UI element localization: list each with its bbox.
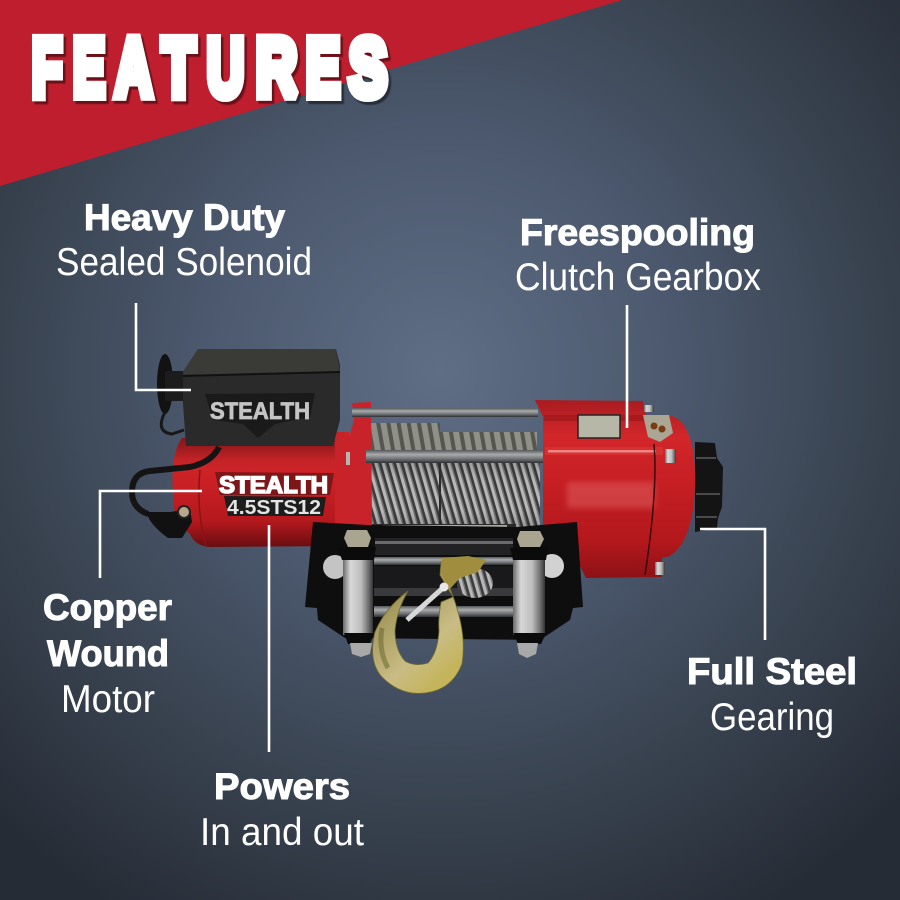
clutch knob — [695, 442, 723, 532]
hook — [373, 556, 493, 693]
leader line: powers — [268, 525, 270, 752]
label: heavy duty solenoid — [56, 197, 312, 284]
wire rope eye — [457, 568, 493, 598]
title: R — [256, 22, 297, 114]
power cable — [132, 447, 219, 538]
label: copper wound motor: Wound — [47, 633, 169, 674]
label: copper wound motor: Motor — [61, 678, 155, 721]
label: powers in and out: Powers — [214, 766, 350, 807]
label: full steel gearing: Gearing — [710, 696, 834, 739]
solenoid box — [181, 349, 340, 446]
leader line: gearbox — [626, 305, 628, 428]
leader line: solenoid — [136, 303, 191, 390]
title — [32, 22, 387, 114]
solenoid box: STEALTH — [210, 398, 310, 425]
title: T — [162, 22, 195, 114]
label: powers in and out — [200, 766, 364, 854]
fairlead mount — [305, 522, 583, 640]
title: A — [115, 22, 152, 114]
label: full steel gearing: Full Steel — [687, 651, 857, 692]
warning plate strip — [372, 524, 516, 535]
label: heavy duty solenoid: Heavy Duty — [84, 197, 285, 238]
motor nameplate — [215, 472, 334, 519]
cable drum — [368, 423, 540, 527]
leader line: motor — [100, 491, 202, 578]
title: S — [349, 22, 387, 114]
label: copper wound motor — [43, 587, 172, 721]
label: heavy duty solenoid: Sealed Solenoid — [56, 241, 312, 284]
label: copper wound motor: Copper — [43, 587, 172, 628]
label: freespooling clutch gearbox: Freespooling — [520, 212, 755, 253]
winch — [132, 349, 723, 693]
warning plate strip: WARNING — [395, 526, 430, 534]
gearbox — [535, 400, 695, 578]
left roller — [323, 530, 376, 657]
leader line: gearing — [700, 529, 765, 640]
title: U — [207, 22, 244, 114]
title: E — [306, 22, 340, 114]
left end plate — [347, 402, 372, 535]
motor nameplate: 4.5STS12 — [227, 497, 321, 519]
red corner banner — [0, 0, 622, 186]
label: full steel gearing — [687, 651, 857, 739]
solenoid connector — [157, 354, 184, 434]
motor body — [172, 432, 349, 547]
label: powers in and out: In and out — [200, 811, 364, 854]
tie bars — [346, 408, 546, 465]
label: freespooling clutch gearbox: Clutch Gearbox — [515, 256, 761, 299]
label: freespooling clutch gearbox — [515, 212, 761, 299]
title: F — [32, 22, 62, 114]
motor nameplate: STEALTH — [219, 472, 328, 499]
right roller — [510, 531, 564, 658]
title: E — [73, 22, 105, 114]
